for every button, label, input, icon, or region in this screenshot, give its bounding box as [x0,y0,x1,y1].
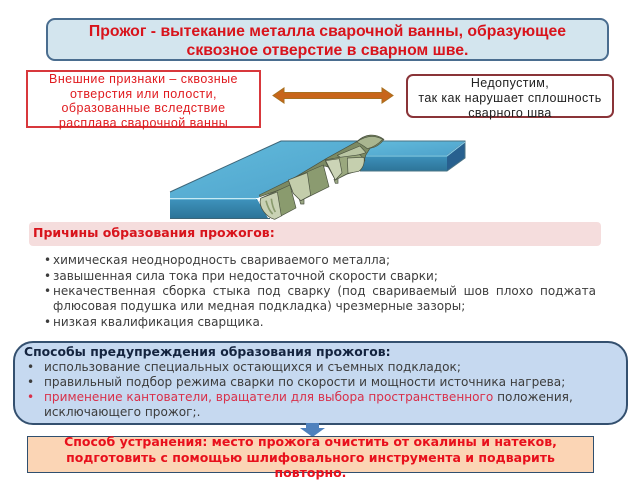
causes list: • [44,284,51,298]
peg right [334,178,338,183]
causes list: низкая квалификация сварщика. [53,315,264,329]
remedy text: Способ устранения: место прожога очистить от окалины и натеков, [64,434,557,449]
remedy panel [27,436,594,473]
left plate [170,141,362,218]
prevention text: Способы предупреждения образования прожогов: [24,344,391,359]
causes heading: Причины образования прожогов: [33,225,275,240]
causes list: завышенная сила тока при недостаточной скорости сварки; [53,269,438,283]
panel: external signs [26,70,261,128]
block 1 [260,185,296,219]
remedy text [64,434,557,480]
seam body [259,135,384,197]
prevention text: • [27,390,34,404]
illustration: welded plates with burn-through [170,134,466,220]
panel: external signs: отверстия или полости, [70,86,217,100]
block 3 [325,155,365,180]
prevention panel [13,341,628,425]
down arrow [300,423,325,436]
block 2 [288,165,329,201]
causes list: • [44,269,51,283]
title text: Прожог - вытекание металла сварочной ванны, образующее [89,23,566,40]
prevention text: правильный подбор режима сварки по скорости и мощности источника нагрева; [44,375,565,389]
double arrow [272,87,394,104]
prevention text: • [27,375,34,389]
right plate [355,141,465,171]
causes list: флюсовая подушка или медная подкладка) чрезмерные зазоры; [53,299,465,313]
remedy text: повторно. [275,465,346,480]
prevention text: использование специальных остающихся и съемных подкладок; [44,360,461,374]
weld seam with burn-through [259,135,384,219]
remedy text: подготовить с помощью шлифовального инструмента и подварить [66,450,555,464]
prevention text: • [27,360,34,374]
causes list: некачественная сборка стыка под сварку (под свариваемый шов плохо поджата [53,284,596,298]
causes heading bar [29,222,601,246]
panel: external signs: Внешние признаки – сквозные [49,72,238,86]
prevention text: применение кантователи, вращатели для выбора пространственного положения, [44,390,573,404]
panel: external signs: образованные вследствие [62,101,226,115]
causes list: химическая неоднородность свариваемого металла; [53,253,390,267]
title panel [46,18,609,61]
causes list: • [44,253,51,267]
panel: inadmissible: Недопустим, [471,76,549,90]
panel: inadmissible: так как нарушает сплошность [418,91,602,105]
title text [89,23,566,59]
causes list: • [44,315,51,329]
panel: external signs: расплава сварочной ванны [59,116,228,130]
causes list [44,253,596,329]
prevention text: исключающего прожог;. [44,405,200,419]
peg left [299,198,304,204]
panel: inadmissible: сварного шва [468,106,552,120]
title text: сквозное отверстие в сварном шве. [187,42,468,59]
panel: inadmissible [406,74,614,118]
prevention text [24,344,573,419]
